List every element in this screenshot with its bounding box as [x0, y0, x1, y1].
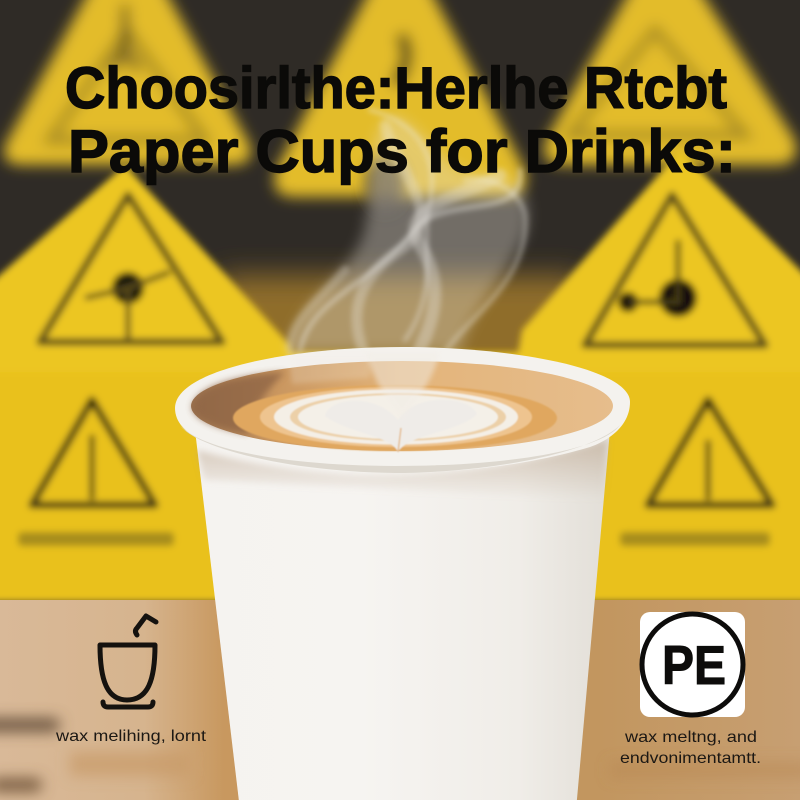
- steam veil: [288, 115, 528, 352]
- label: right caption: [620, 729, 761, 767]
- background: dark wall: [0, 0, 800, 370]
- steam over coffee: [366, 352, 440, 420]
- icon: PE badge: [640, 612, 745, 717]
- cup body: [195, 430, 610, 800]
- sign: middle left: [0, 165, 290, 372]
- latte art heart: [325, 400, 477, 452]
- sign: lower right: [648, 398, 772, 505]
- dark crema at left: [192, 372, 285, 434]
- cup rim: [175, 347, 630, 473]
- PE letters: PE: [662, 634, 726, 696]
- right caption line 2: endvonimentamtt.: [620, 750, 761, 767]
- dark smoke blob: [365, 157, 405, 213]
- background: warm glow behind the steam: [220, 275, 580, 385]
- sign: top right: [544, 0, 796, 165]
- sign: lower left: [32, 398, 155, 505]
- wooden table: [0, 600, 800, 800]
- steam wisps: [290, 110, 525, 395]
- title line 2: Paper Cups for Drinks:: [68, 118, 736, 185]
- background: blurred top warning signs: [4, 0, 796, 197]
- coffee surface: [191, 361, 613, 451]
- cup rim shadow: [197, 440, 607, 500]
- title line 1: Choosirlthe:Herlhe Rtcbt: [65, 56, 727, 121]
- sign caption: left: [18, 532, 174, 546]
- title: [65, 56, 736, 185]
- sign caption: right: [620, 532, 770, 546]
- steam rising from cup: [288, 110, 528, 395]
- sign: top left: [4, 0, 251, 165]
- steam over left rim: [288, 352, 372, 384]
- latte art rings: [233, 385, 557, 452]
- paper cup: [175, 347, 630, 800]
- sign: middle right: [515, 150, 800, 372]
- icon: cup with straw: [100, 616, 156, 707]
- rim under edge: [180, 425, 620, 473]
- label: left caption: wax melihing, lornt: [55, 728, 207, 745]
- sign: top centre: [274, 0, 526, 197]
- right caption line 1: wax meltng, and: [624, 729, 757, 746]
- yellow band lower: [0, 352, 800, 602]
